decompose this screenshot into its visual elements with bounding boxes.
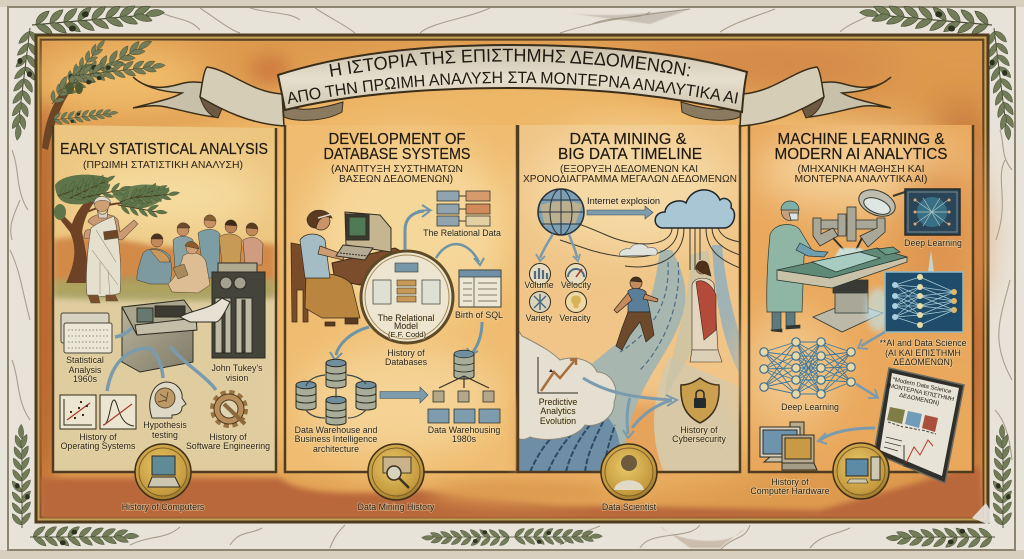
label: software engineering: Software Engineering: [186, 441, 270, 451]
heading: machine learning and modern ai: [774, 131, 948, 185]
heading: development of database systems: DATABASE SYSTEMS: [324, 146, 470, 163]
icon: desktop computers: [760, 422, 817, 470]
diagram: data warehousing hierarchy: 1980s: [452, 434, 477, 444]
icon: tablet: [874, 368, 964, 483]
illustration: surgeon: [767, 201, 828, 332]
label: software engineering: History of: [209, 432, 247, 442]
medal: data scientist: Data Scientist: [602, 502, 657, 512]
panel: data mining and big data: [518, 125, 740, 472]
diagram: data warehouse architecture: Business Intelligence: [295, 434, 377, 444]
illustration: surgical lamp: [855, 185, 905, 221]
illustration: predictive cloud: [518, 330, 616, 439]
heading: data mining and big data timeline: (ΕΞΟΡΥΞΗ ΔΕΔΟΜΕΝΩΝ ΚΑΙ: [560, 163, 698, 175]
illustration: light beam: [825, 248, 885, 272]
arrow: screen to network: [858, 332, 885, 349]
arrow: network to tablet: [856, 384, 878, 398]
illustration: predictive cloud: Predictive: [539, 397, 577, 407]
diagram: relational data tables: The Relational Data: [423, 228, 501, 238]
illustration: operating table: [777, 247, 907, 332]
panel: early statistical analysis: [53, 125, 276, 472]
banner: title ribbon: [132, 44, 892, 127]
illustration: woman in red: [690, 261, 722, 362]
medal: data mining history: Data Mining History: [358, 502, 435, 512]
heading: data mining and big data timeline: ΧΡΟΝΟΔΙΑΓΡΑΜΜΑ ΜΕΓΑΛΩΝ ΔΕΔΟΜΕΝΩΝ: [523, 173, 737, 185]
label: ai and data science: **AI and Data Science: [879, 338, 967, 348]
illustration: punch cards: [61, 313, 112, 353]
label: history of databases: [385, 348, 428, 367]
diagram: data warehouse architecture: architecture: [313, 444, 359, 454]
label: statistical analysis: Analysis: [69, 365, 102, 375]
label: ai and data science: [879, 338, 967, 367]
diagram: data warehouse architecture: Data Warehouse and: [295, 425, 378, 435]
heading: development of database systems: (ΑΝΑΠΤΥΞΗ ΣΥΣΤΗΜΑΤΩΝ: [331, 163, 463, 175]
label: operating systems: Operating Systems: [61, 441, 136, 451]
chart: neural network diagram: [760, 338, 855, 398]
label: statistical analysis: [66, 355, 104, 384]
icon: velocity: [566, 264, 586, 284]
icon: veracity: [566, 292, 586, 312]
illustration: relational model circle: Model: [394, 321, 418, 331]
illustration: vintage computer: [336, 212, 391, 260]
arrows: database flows: [330, 205, 484, 360]
icon: cybersecurity shield: [681, 378, 719, 423]
chart: bell curve: [100, 395, 136, 429]
label: software engineering: [186, 432, 270, 451]
heading: machine learning and modern ai: ΜΟΝΤΕΡΝΑ ΑΝΑΛΥΤΙΚΑ ΑΙ): [794, 173, 928, 185]
illustration: olive tree: [54, 168, 181, 283]
panel: deep learning screen: [905, 189, 960, 235]
ribbon right tail: [740, 67, 891, 126]
icon: tablet: (ΜΟΝΤΕΡΝΑ ΕΠΙΣΤΗΜΗ: [886, 383, 954, 403]
arrow: tablet to computers: [818, 428, 875, 444]
illustration: students: [137, 215, 263, 293]
label: john tukey: John Tukey's: [211, 363, 263, 373]
label: internet explosion: Internet explosion: [587, 196, 660, 206]
label: john tukey: vision: [226, 373, 248, 383]
medal: history of computers: [122, 444, 205, 512]
label: computer hardware: History of: [771, 477, 809, 487]
arrows: predictive analytics flows: [583, 378, 677, 438]
heading: early statistical analysis: [60, 141, 268, 171]
heading: development of database systems: DEVELOPMENT OF: [328, 131, 466, 148]
label: history of databases: Databases: [385, 357, 428, 367]
chart: scatter plot: [60, 395, 96, 429]
ribbon fold shadows: [283, 100, 343, 120]
label: deep learning top: Deep Learning: [904, 238, 962, 248]
icon: variety: [530, 292, 550, 312]
label: ai and data science: (ΑΙ ΚΑΙ ΕΠΙΣΤΗΜΗ: [885, 348, 961, 358]
icon: globe: [538, 189, 584, 235]
illustration: relational model circle: The Relational: [378, 313, 434, 323]
icon: head with brain: [150, 382, 186, 418]
label: volume velocity: [524, 280, 592, 290]
label: john tukey: [211, 363, 263, 383]
arrow: warehouse to hierarchy: [380, 387, 428, 403]
heading: machine learning and modern ai: MACHINE LEARNING &: [778, 131, 945, 148]
illustration: relational model circle: [361, 251, 453, 343]
diagram: data warehousing hierarchy: [428, 350, 500, 444]
illustration: teacher in toga: [84, 196, 138, 303]
ribbon left tail: [133, 67, 284, 126]
illustration: running man: [614, 277, 658, 350]
diagram: relational data tables: [423, 191, 501, 238]
heading: data mining and big data timeline: DATA MINING &: [570, 131, 687, 148]
illustration: data river: [518, 245, 740, 472]
arrow: internet to cloud: [587, 206, 653, 219]
label: history of databases: History of: [387, 348, 425, 358]
panel: neural network screen: [866, 250, 963, 332]
panel: machine learning and modern ai: [740, 125, 980, 472]
heading: machine learning and modern ai: MODERN AI ANALYTICS: [774, 146, 948, 163]
heading: development of database systems: [324, 131, 470, 185]
label: deep learning lower: Deep Learning: [781, 402, 839, 412]
heading: early statistical analysis: EARLY STATISTICAL ANALYSIS: [60, 141, 268, 158]
diagram: sql table: [455, 270, 503, 320]
heading: data mining and big data timeline: BIG DATA TIMELINE: [558, 146, 702, 163]
page fold corner: [972, 503, 995, 524]
label: statistical analysis: 1960s: [73, 374, 98, 384]
heading: machine learning and modern ai: (ΜΗΧΑΝΙΚΗ ΜΑΘΗΣΗ ΚΑΙ: [798, 163, 924, 175]
label: history of cybersecurity: Cybersecurity: [672, 434, 726, 444]
label: history of cybersecurity: History of: [680, 425, 718, 435]
heading: data mining and big data timeline: [523, 131, 737, 185]
illustration: relational model circle: (E.F. Codd): [388, 330, 426, 339]
arrows: blue connectors: [107, 328, 216, 391]
label: variety veracity: Variety: [526, 313, 553, 323]
label: statistical analysis: Statistical: [66, 355, 104, 365]
illustration: light parchment area: [654, 357, 740, 472]
label: computer hardware: Computer Hardware: [750, 486, 830, 496]
label: computer hardware: [750, 477, 830, 496]
title text: [288, 48, 738, 104]
label: operating systems: [61, 432, 136, 451]
heading: early statistical analysis: (ΠΡΩΙΜΗ ΣΤΑΤΙΣΤΙΚΗ ΑΝΑΛΥΣΗ): [83, 159, 243, 171]
label: variety veracity: [526, 313, 591, 323]
illustration: robotic arm: [813, 207, 885, 250]
illustration: tape mainframe: [212, 263, 265, 358]
label: hypothesis testing: testing: [152, 430, 178, 440]
panel: development of database systems: [285, 125, 517, 472]
label: operating systems: History of: [79, 432, 117, 442]
icon: tablet: ΔΕΔΟΜΕΝΩΝ): [898, 393, 939, 407]
label: hypothesis testing: [143, 420, 187, 440]
illustration: desk: [332, 248, 410, 285]
diagram: data warehousing hierarchy: Data Warehousing: [428, 425, 500, 435]
label: volume velocity: Volume: [524, 280, 554, 290]
illustration: small cloud: [620, 244, 657, 256]
illustration: predictive cloud: Analytics: [540, 406, 576, 416]
medal: history of computer hardware: [833, 443, 889, 499]
icon: gear and wrench: [213, 393, 245, 425]
label: history of cybersecurity: [672, 425, 726, 444]
title text: ΑΠΟ ΤΗΝ ΠΡΩΙΜΗ ΑΝΑΛΥΣΗ ΣΤΑ ΜΟΝΤΕΡΝΑ ΑΝΑΛΥΤΙΚΑ ΑΙ: [288, 72, 738, 104]
icon: tablet: *Modern Data Science: [892, 377, 952, 396]
olive tree top left: [42, 31, 166, 150]
label: ai and data science: ΔΕΔΟΜΕΝΩΝ): [893, 357, 953, 367]
diagram: data warehouse architecture: [295, 359, 378, 454]
label: hypothesis testing: Hypothesis: [143, 420, 187, 430]
illustration: woman at computer: [291, 210, 360, 326]
ribbon main band: [278, 45, 747, 112]
title text: Η ΙΣΤΟΡΙΑ ΤΗΣ ΕΠΙΣΤΗΜΗΣ ΔΕΔΟΜΕΝΩΝ:: [329, 48, 690, 77]
icon: data cloud: [655, 190, 735, 228]
medal: data scientist: [601, 444, 657, 512]
medal: history of computers: History of Computers: [122, 502, 205, 512]
medal: data mining history: [358, 444, 435, 512]
label: volume velocity: Velocity: [561, 280, 592, 290]
heading: development of database systems: ΒΑΣΕΩΝ ΔΕΔΟΜΕΝΩΝ): [339, 173, 453, 185]
illustration: console: [122, 298, 230, 372]
label: variety veracity: Veracity: [559, 313, 591, 323]
illustration: predictive cloud: Evolution: [540, 416, 576, 426]
arrows: globe to v icons: [536, 234, 580, 261]
icon: volume: [530, 264, 550, 284]
diagram: sql table: Birth of SQL: [455, 310, 503, 320]
illustration: stream lines from cloud: [560, 220, 740, 270]
